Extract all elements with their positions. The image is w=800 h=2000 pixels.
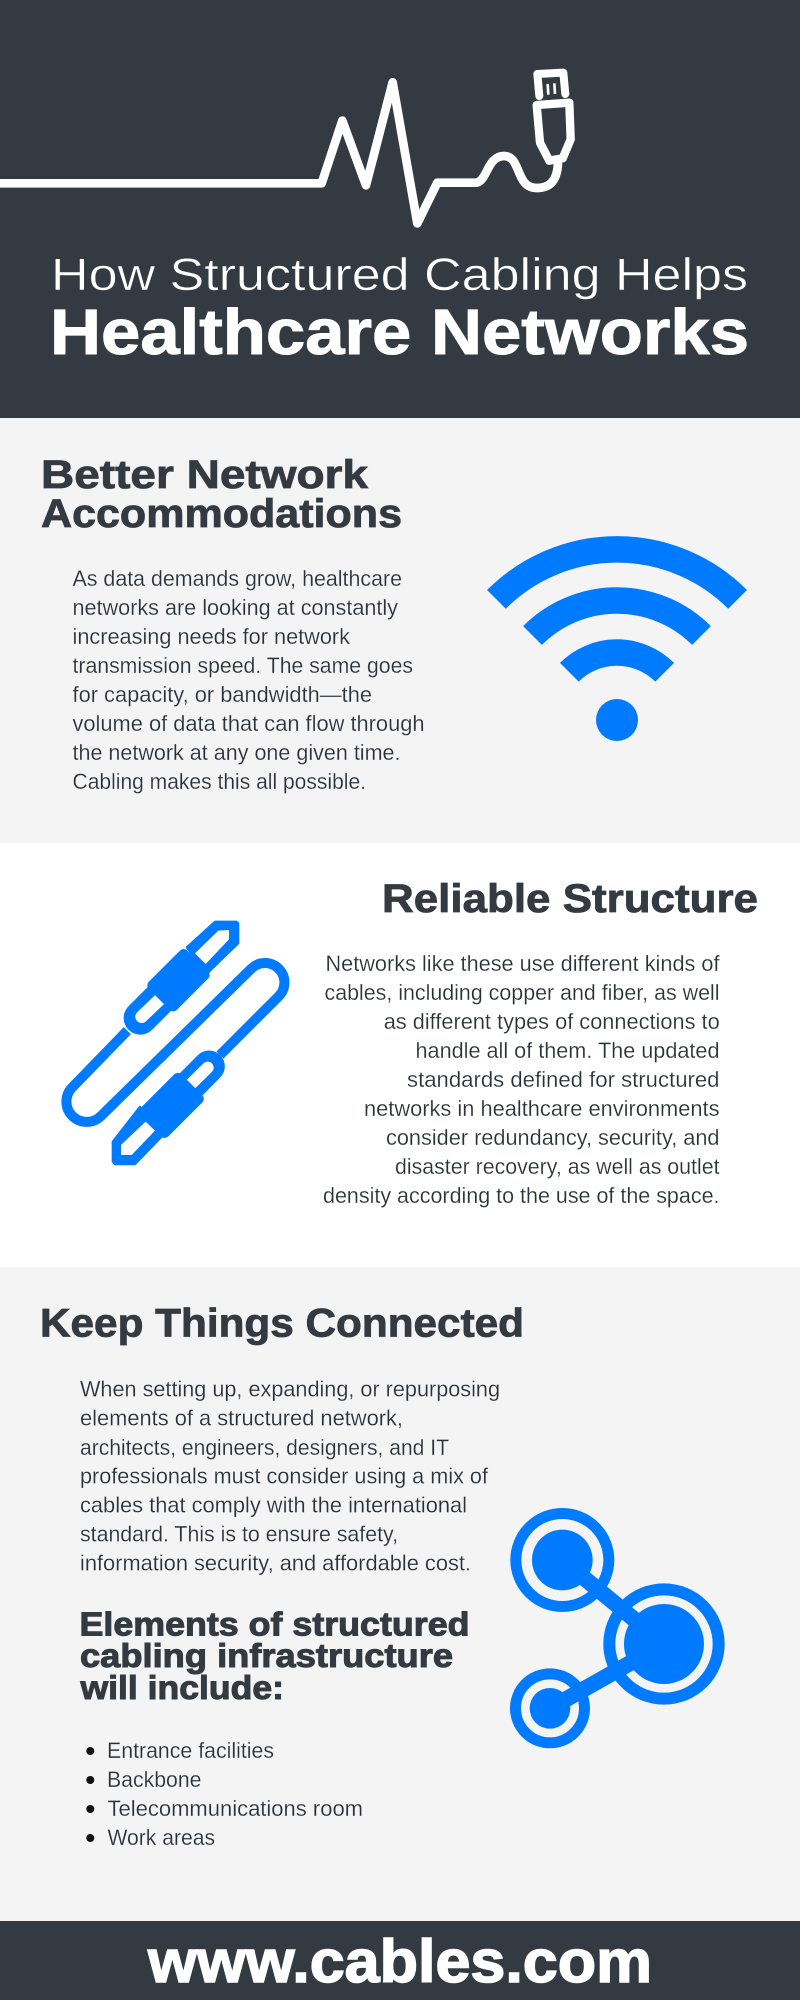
text block: Cabling makes this all possible.	[72, 769, 366, 794]
text block: the network at any one given time.	[72, 740, 400, 765]
text block: When setting up, expanding, or repurposing	[80, 1377, 500, 1402]
bullet list: Telecommunications room	[108, 1796, 363, 1821]
heading: Accommodations	[41, 492, 402, 536]
icon: heartbeat line ending in network cable plug	[0, 73, 571, 223]
text block: cables, including copper and fiber, as well	[324, 980, 720, 1005]
heading: Reliable Structure	[382, 877, 758, 921]
text block: networks are looking at constantly	[72, 595, 398, 620]
panel: reliable structure	[0, 843, 800, 1267]
panel: keep things connected	[0, 1267, 800, 1921]
bullet list	[86, 1738, 363, 1850]
heading: Better Network	[41, 453, 369, 497]
bullet list: Work areas	[108, 1825, 215, 1850]
title: How Structured Cabling Helps	[51, 249, 748, 300]
panel: header	[0, 0, 800, 418]
text block: elements of a structured network,	[80, 1406, 403, 1430]
text block: as different types of connections to	[384, 1009, 720, 1034]
text block	[80, 1377, 500, 1575]
panel: better network accommodations	[0, 418, 800, 843]
text block: transmission speed. The same goes	[72, 653, 413, 678]
text block: density according to the use of the space.	[323, 1183, 720, 1208]
text block: volume of data that can flow through	[72, 711, 424, 736]
icon: wifi	[496, 549, 738, 741]
text block: cables that comply with the international	[80, 1493, 467, 1518]
text block: architects, engineers, designers, and IT	[80, 1435, 449, 1460]
text block: professionals must consider using a mix of	[80, 1464, 489, 1489]
text block: for capacity, or bandwidth—the	[72, 682, 372, 707]
text block: disaster recovery, as well as outlet	[395, 1154, 720, 1179]
title	[50, 249, 749, 368]
subheading	[79, 1606, 469, 1706]
subheading: Elements of structured	[80, 1606, 470, 1642]
bullet list: Backbone	[107, 1767, 202, 1792]
website url: www.cables.com	[147, 1928, 652, 1995]
text block: handle all of them. The updated	[416, 1038, 720, 1063]
heading	[41, 453, 402, 536]
text block: networks in healthcare environments	[364, 1096, 720, 1121]
icon: audio jack cable	[66, 922, 284, 1164]
text block: Networks like these use different kinds of	[326, 951, 720, 976]
bullet list: Entrance facilities	[107, 1738, 274, 1763]
text block: standard. This is to ensure safety,	[80, 1521, 398, 1546]
icon: connected network nodes	[515, 1513, 719, 1743]
title: Healthcare Networks	[50, 296, 749, 368]
text block: increasing needs for network	[72, 624, 351, 649]
text block: standards defined for structured	[407, 1067, 720, 1092]
text block: As data demands grow, healthcare	[72, 566, 402, 591]
subheading: will include:	[79, 1669, 284, 1706]
text block: consider redundancy, security, and	[386, 1125, 720, 1150]
subheading: cabling infrastructure	[80, 1637, 453, 1674]
heading: Keep Things Connected	[40, 1302, 524, 1346]
text block: information security, and affordable cost.	[80, 1550, 471, 1575]
text block	[72, 566, 424, 794]
text block	[323, 951, 720, 1208]
panel: footer	[0, 1921, 800, 2000]
